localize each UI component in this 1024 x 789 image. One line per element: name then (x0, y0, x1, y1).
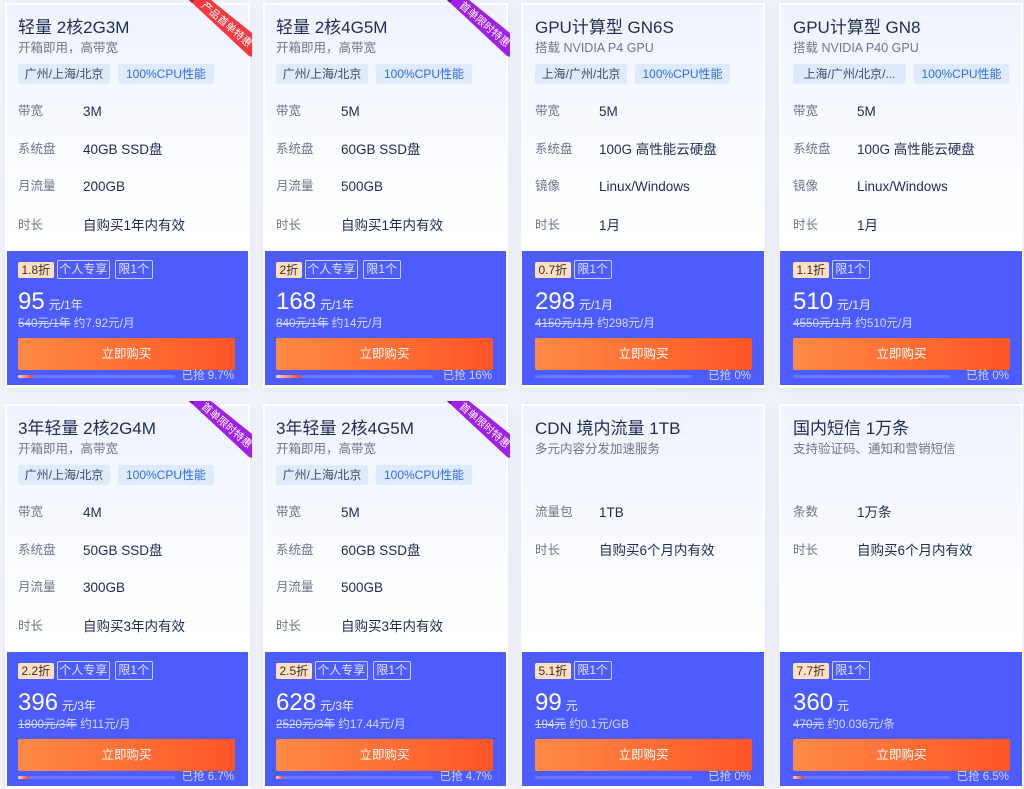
region tag: 广州/上海/北京 (25, 468, 103, 482)
value: 自购买3年内有效 (341, 619, 443, 634)
sold label: 已抢 0% (966, 370, 1009, 382)
spec: image: 镜像 (793, 179, 818, 193)
cpu tag (914, 64, 1009, 84)
value: 100G 高性能云硬盘 (599, 142, 717, 157)
value: 5M (599, 104, 618, 119)
subtitle: 开箱即用，高带宽 (276, 41, 376, 55)
heading: 3年轻量 2核2G4M (18, 419, 156, 438)
price: 168 元/1年 (276, 288, 354, 315)
heading: 3年轻量 2核4G5M (276, 419, 414, 438)
price: 510 元/1月 (793, 288, 871, 315)
subtitle: 开箱即用，高带宽 (18, 442, 118, 456)
sold label: 已抢 6.5% (957, 771, 1009, 783)
buy button: 立即购买 (359, 347, 410, 361)
buy button (793, 338, 1010, 370)
original price: 470元 约0.036元/条 (793, 718, 895, 731)
badges (793, 260, 870, 279)
spec: duration: 时长 (276, 619, 301, 633)
badges (535, 260, 612, 279)
spec: traffic package: 流量包 (535, 505, 573, 519)
badges: 1.1折 (796, 262, 825, 276)
badges: 个人专享 (59, 262, 107, 276)
original price: 4150元/1月 约298元/月 (535, 317, 655, 330)
value: 1月 (857, 218, 878, 233)
original price: 840元/1年 约14元/月 (276, 317, 383, 330)
subtitle: 开箱即用，高带宽 (18, 41, 118, 55)
card: GPU计算型 GN8 (779, 3, 1023, 388)
value: 5M (341, 104, 360, 119)
value: 500GB (341, 179, 383, 194)
badges: 7.7折 (796, 664, 825, 678)
subtitle: 开箱即用，高带宽 (276, 442, 376, 456)
badges: 2.2折 (22, 664, 50, 678)
buy button (276, 739, 493, 771)
sold label: 已抢 6.7% (182, 771, 234, 783)
badges (793, 661, 870, 680)
spec: duration: 时长 (18, 619, 43, 633)
cpu tag (376, 465, 472, 485)
badges: 0.7折 (538, 262, 567, 276)
original price: 194元 约0.1元/GB (535, 718, 629, 731)
progress bar (535, 375, 692, 378)
buy button (18, 338, 235, 370)
spec: disk: 系统盘 (18, 543, 56, 557)
badges: 限1个 (118, 663, 149, 677)
region tag: 广州/上海/北京 (283, 468, 361, 482)
value: 自购买6个月内有效 (857, 543, 973, 558)
progress bar (18, 776, 175, 779)
subtitle: 搭载 NVIDIA P40 GPU (793, 41, 919, 55)
spec: disk: 系统盘 (276, 543, 314, 557)
buy button (793, 739, 1010, 771)
buy button: 立即购买 (876, 748, 926, 762)
price panel (522, 251, 764, 385)
card: 轻量 2核2G3M (5, 3, 250, 388)
cpu tag: 100%CPU性能 (126, 468, 206, 482)
buy button: 立即购买 (101, 748, 152, 762)
price panel (522, 652, 764, 786)
spec: bandwidth: 带宽 (535, 104, 560, 118)
spec: count: 条数 (793, 505, 818, 519)
badges (18, 260, 153, 279)
price: 360 元 (793, 689, 849, 716)
original price: 4550元/1月 约510元/月 (793, 317, 913, 330)
cpu tag (376, 64, 472, 84)
spec: traffic: 月流量 (276, 580, 314, 594)
badges: 个人专享 (59, 663, 107, 677)
price panel (7, 652, 248, 786)
buy button: 立即购买 (359, 748, 410, 762)
ribbon: 首单限时特惠: 首单限时特惠 (457, 400, 513, 451)
value: 100G 高性能云硬盘 (857, 142, 975, 157)
badges: 限1个 (835, 663, 866, 677)
badges: 2折 (280, 262, 298, 276)
cpu tag: 100%CPU性能 (384, 468, 464, 482)
price panel (265, 652, 506, 786)
region tag: 上海/广州/北京/... (803, 67, 896, 81)
original price: 2520元/3年 约17.44元/月 (276, 718, 406, 731)
ribbon: 首单限时特惠: 首单限时特惠 (199, 400, 255, 451)
badges (276, 661, 411, 680)
badges: 1.8折 (22, 262, 50, 276)
spec: disk: 系统盘 (535, 142, 573, 156)
badges: 限1个 (577, 262, 608, 276)
subtitle: 支持验证码、通知和营销短信 (793, 442, 956, 456)
region tag (535, 64, 627, 84)
card: 3年轻量 2核2G4M (5, 404, 250, 789)
heading: CDN 境内流量 1TB (535, 419, 680, 438)
spec: traffic: 月流量 (276, 179, 314, 193)
region tag (18, 465, 110, 485)
subtitle: 多元内容分发加速服务 (535, 442, 660, 456)
spec: image: 镜像 (535, 179, 560, 193)
value: 300GB (83, 580, 125, 595)
price panel (780, 251, 1022, 385)
badges: 限1个 (835, 262, 866, 276)
buy button (18, 739, 235, 771)
spec: disk: 系统盘 (793, 142, 831, 156)
value: 3M (83, 104, 102, 119)
region tag: 上海/广州/北京 (542, 67, 620, 81)
card: 3年轻量 2核4G5M (263, 404, 508, 789)
region tag: 广州/上海/北京 (283, 67, 361, 81)
value: 1TB (599, 505, 624, 520)
price: 298 元/1月 (535, 288, 613, 315)
buy button: 立即购买 (618, 347, 668, 361)
region tag: 广州/上海/北京 (25, 67, 103, 81)
region tag (18, 64, 110, 84)
region tag (276, 64, 368, 84)
price panel (780, 652, 1022, 786)
spec: bandwidth: 带宽 (793, 104, 818, 118)
cpu tag: 100%CPU性能 (384, 67, 464, 81)
value: Linux/Windows (599, 179, 690, 194)
value: 60GB SSD盘 (341, 543, 421, 558)
card: CDN 境内流量 1TB (521, 404, 765, 789)
badges: 2.5折 (280, 664, 308, 678)
cpu tag: 100%CPU性能 (921, 67, 1002, 81)
badges: 限1个 (366, 262, 397, 276)
buy button (276, 338, 493, 370)
badges (18, 661, 153, 680)
sold label: 已抢 16% (443, 370, 492, 382)
badges: 限1个 (118, 262, 149, 276)
value: 60GB SSD盘 (341, 142, 421, 157)
progress bar (18, 375, 175, 378)
spec: duration: 时长 (276, 218, 301, 232)
heading: 轻量 2核4G5M (276, 18, 387, 37)
spec: duration: 时长 (793, 543, 818, 557)
badges (535, 661, 612, 680)
badges: 限1个 (376, 663, 407, 677)
progress bar (793, 375, 950, 378)
value: 500GB (341, 580, 383, 595)
spec: duration: 时长 (535, 543, 560, 557)
spec: bandwidth: 带宽 (18, 505, 43, 519)
heading: 国内短信 1万条 (793, 419, 909, 438)
spec: bandwidth: 带宽 (276, 104, 301, 118)
original price: 540元/1年 约7.92元/月 (18, 317, 135, 330)
sold label: 已抢 0% (708, 771, 751, 783)
value: 5M (857, 104, 876, 119)
region tag (276, 465, 368, 485)
buy button: 立即购买 (618, 748, 668, 762)
price: 99 元 (535, 689, 578, 716)
progress bar (276, 375, 433, 378)
heading: 轻量 2核2G3M (18, 18, 129, 37)
cpu tag (118, 64, 214, 84)
value: 40GB SSD盘 (83, 142, 163, 157)
badges: 5.1折 (538, 664, 567, 678)
card: GPU计算型 GN6S (521, 3, 765, 388)
price: 628 元/3年 (276, 689, 354, 716)
value: Linux/Windows (857, 179, 948, 194)
value: 自购买1年内有效 (341, 218, 443, 233)
sold label: 已抢 4.7% (440, 771, 492, 783)
badges (276, 260, 401, 279)
sold label: 已抢 9.7% (182, 370, 234, 382)
value: 4M (83, 505, 102, 520)
badges: 个人专享 (317, 663, 365, 677)
spec: duration: 时长 (18, 218, 43, 232)
value: 200GB (83, 179, 125, 194)
price: 396 元/3年 (18, 689, 96, 716)
spec: disk: 系统盘 (276, 142, 314, 156)
spec: disk: 系统盘 (18, 142, 56, 156)
price panel (265, 251, 506, 385)
region tag (793, 64, 906, 84)
original price: 1800元/3年 约11元/月 (18, 718, 131, 731)
value: 1万条 (857, 505, 892, 520)
ribbon: 首单限时特惠: 首单限时特惠 (457, 0, 513, 50)
value: 5M (341, 505, 360, 520)
spec: traffic: 月流量 (18, 580, 56, 594)
card: 轻量 2核4G5M (263, 3, 508, 388)
cpu tag: 100%CPU性能 (642, 67, 723, 81)
value: 1月 (599, 218, 620, 233)
spec: bandwidth: 带宽 (276, 505, 301, 519)
buy button (535, 739, 752, 771)
buy button: 立即购买 (876, 347, 926, 361)
value: 自购买1年内有效 (83, 218, 185, 233)
sold label: 已抢 0% (708, 370, 751, 382)
subtitle: 搭载 NVIDIA P4 GPU (535, 41, 654, 55)
progress bar (793, 776, 950, 779)
badges: 个人专享 (307, 262, 355, 276)
value: 自购买6个月内有效 (599, 543, 715, 558)
cpu tag: 100%CPU性能 (126, 67, 206, 81)
value: 50GB SSD盘 (83, 543, 163, 558)
price panel (7, 251, 248, 385)
badges: 限1个 (577, 663, 608, 677)
price: 95 元/1年 (18, 288, 83, 315)
spec: duration: 时长 (793, 218, 818, 232)
heading: GPU计算型 GN6S (535, 18, 674, 37)
ribbon: 产品首单特惠: 产品首单特惠 (199, 0, 255, 50)
spec: bandwidth: 带宽 (18, 104, 43, 118)
progress bar (535, 776, 692, 779)
buy button: 立即购买 (101, 347, 152, 361)
spec: traffic: 月流量 (18, 179, 56, 193)
heading: GPU计算型 GN8 (793, 18, 921, 37)
value: 自购买3年内有效 (83, 619, 185, 634)
cpu tag (635, 64, 730, 84)
card: 国内短信 1万条 (779, 404, 1023, 789)
buy button (535, 338, 752, 370)
progress bar (276, 776, 433, 779)
spec: duration: 时长 (535, 218, 560, 232)
cpu tag (118, 465, 214, 485)
